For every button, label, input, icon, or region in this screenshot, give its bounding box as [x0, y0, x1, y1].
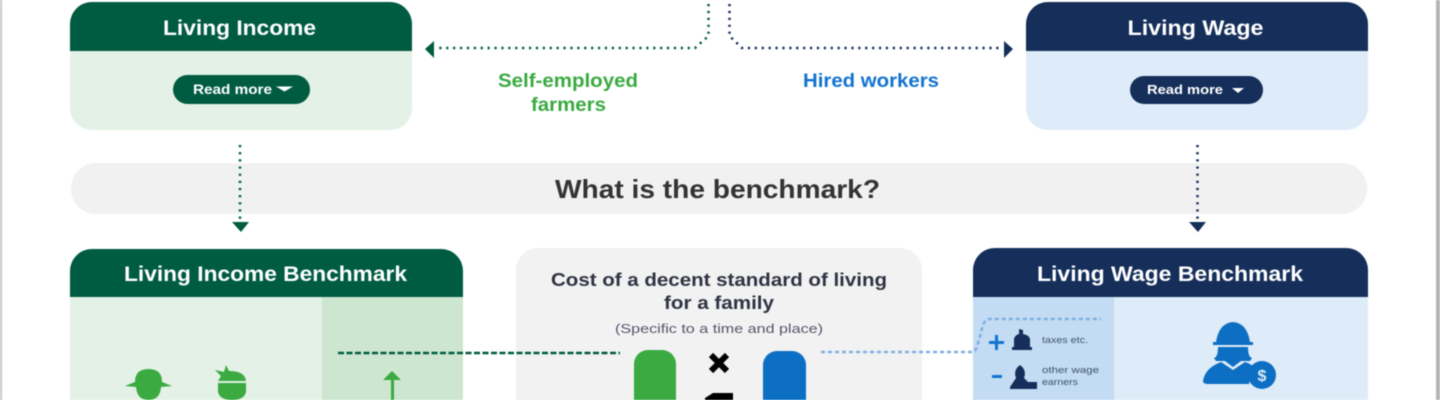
icon: partial symbol	[705, 393, 733, 400]
arrow: Living Wage to benchmark	[1189, 145, 1206, 232]
heading: Living Wage Benchmark: Living Wage Benchmark	[1037, 263, 1303, 286]
label: Hired workers: Hired workers	[803, 71, 939, 92]
bar: blue	[763, 351, 806, 400]
heading: Living Income: Living Income	[163, 17, 316, 40]
plus sign	[989, 335, 1004, 350]
heading: cost of a decent standard of living: for a family	[664, 293, 774, 313]
panel: Living Wage	[1026, 2, 1368, 130]
heading: cost of a decent standard of living	[551, 270, 887, 313]
panel: Living Income	[70, 2, 412, 130]
arrow: to Living Income	[425, 4, 708, 58]
button: Read more	[173, 75, 310, 104]
label: other wage earners: other wage	[1042, 365, 1099, 376]
icon: farmer with headscarf	[215, 365, 246, 400]
icon: government building	[1012, 329, 1032, 350]
arrow: Living Income to benchmark	[232, 145, 249, 232]
label: other wage earners	[1042, 365, 1099, 388]
icon: worker with dollar coin	[1203, 322, 1276, 389]
heading: cost of a decent standard of living: Cost of a decent standard of living	[551, 270, 887, 290]
arrow: to Living Wage	[730, 4, 1013, 58]
panel: Living Income Benchmark	[70, 249, 463, 400]
connector: green dashed line	[338, 352, 620, 354]
banner: What is the benchmark?	[71, 163, 1367, 214]
icon: other wage earners	[1010, 365, 1037, 389]
label: Self-employed farmers: farmers	[531, 95, 606, 116]
banner: What is the benchmark?: What is the benchmark?	[555, 174, 880, 204]
button: Read more: Read more	[1147, 82, 1223, 97]
note: specific to a time and place: (Specific to a time and place)	[615, 321, 823, 336]
button: Read more	[1130, 76, 1263, 104]
heading: Living Wage: Living Wage	[1128, 17, 1264, 40]
button: Read more: Read more	[193, 81, 272, 97]
icon: farmer with hat	[125, 369, 172, 400]
minus sign	[992, 375, 1002, 378]
icon: upward arrow	[383, 371, 401, 400]
heading: Living Income Benchmark: Living Income Benchmark	[124, 263, 407, 286]
connector: blue dotted line	[821, 319, 1101, 352]
label: Self-employed farmers	[498, 71, 638, 116]
label: Self-employed farmers: Self-employed	[498, 71, 638, 92]
label: other wage earners: earners	[1042, 377, 1078, 388]
label: taxes etc.: taxes etc.	[1042, 335, 1088, 346]
icon: worker with dollar coin: $	[1258, 368, 1267, 385]
panel: Living Wage Benchmark	[973, 248, 1368, 400]
icon: multiply sign	[711, 355, 727, 371]
panel: cost of a decent standard of living	[516, 248, 922, 400]
bar: green	[634, 350, 676, 400]
